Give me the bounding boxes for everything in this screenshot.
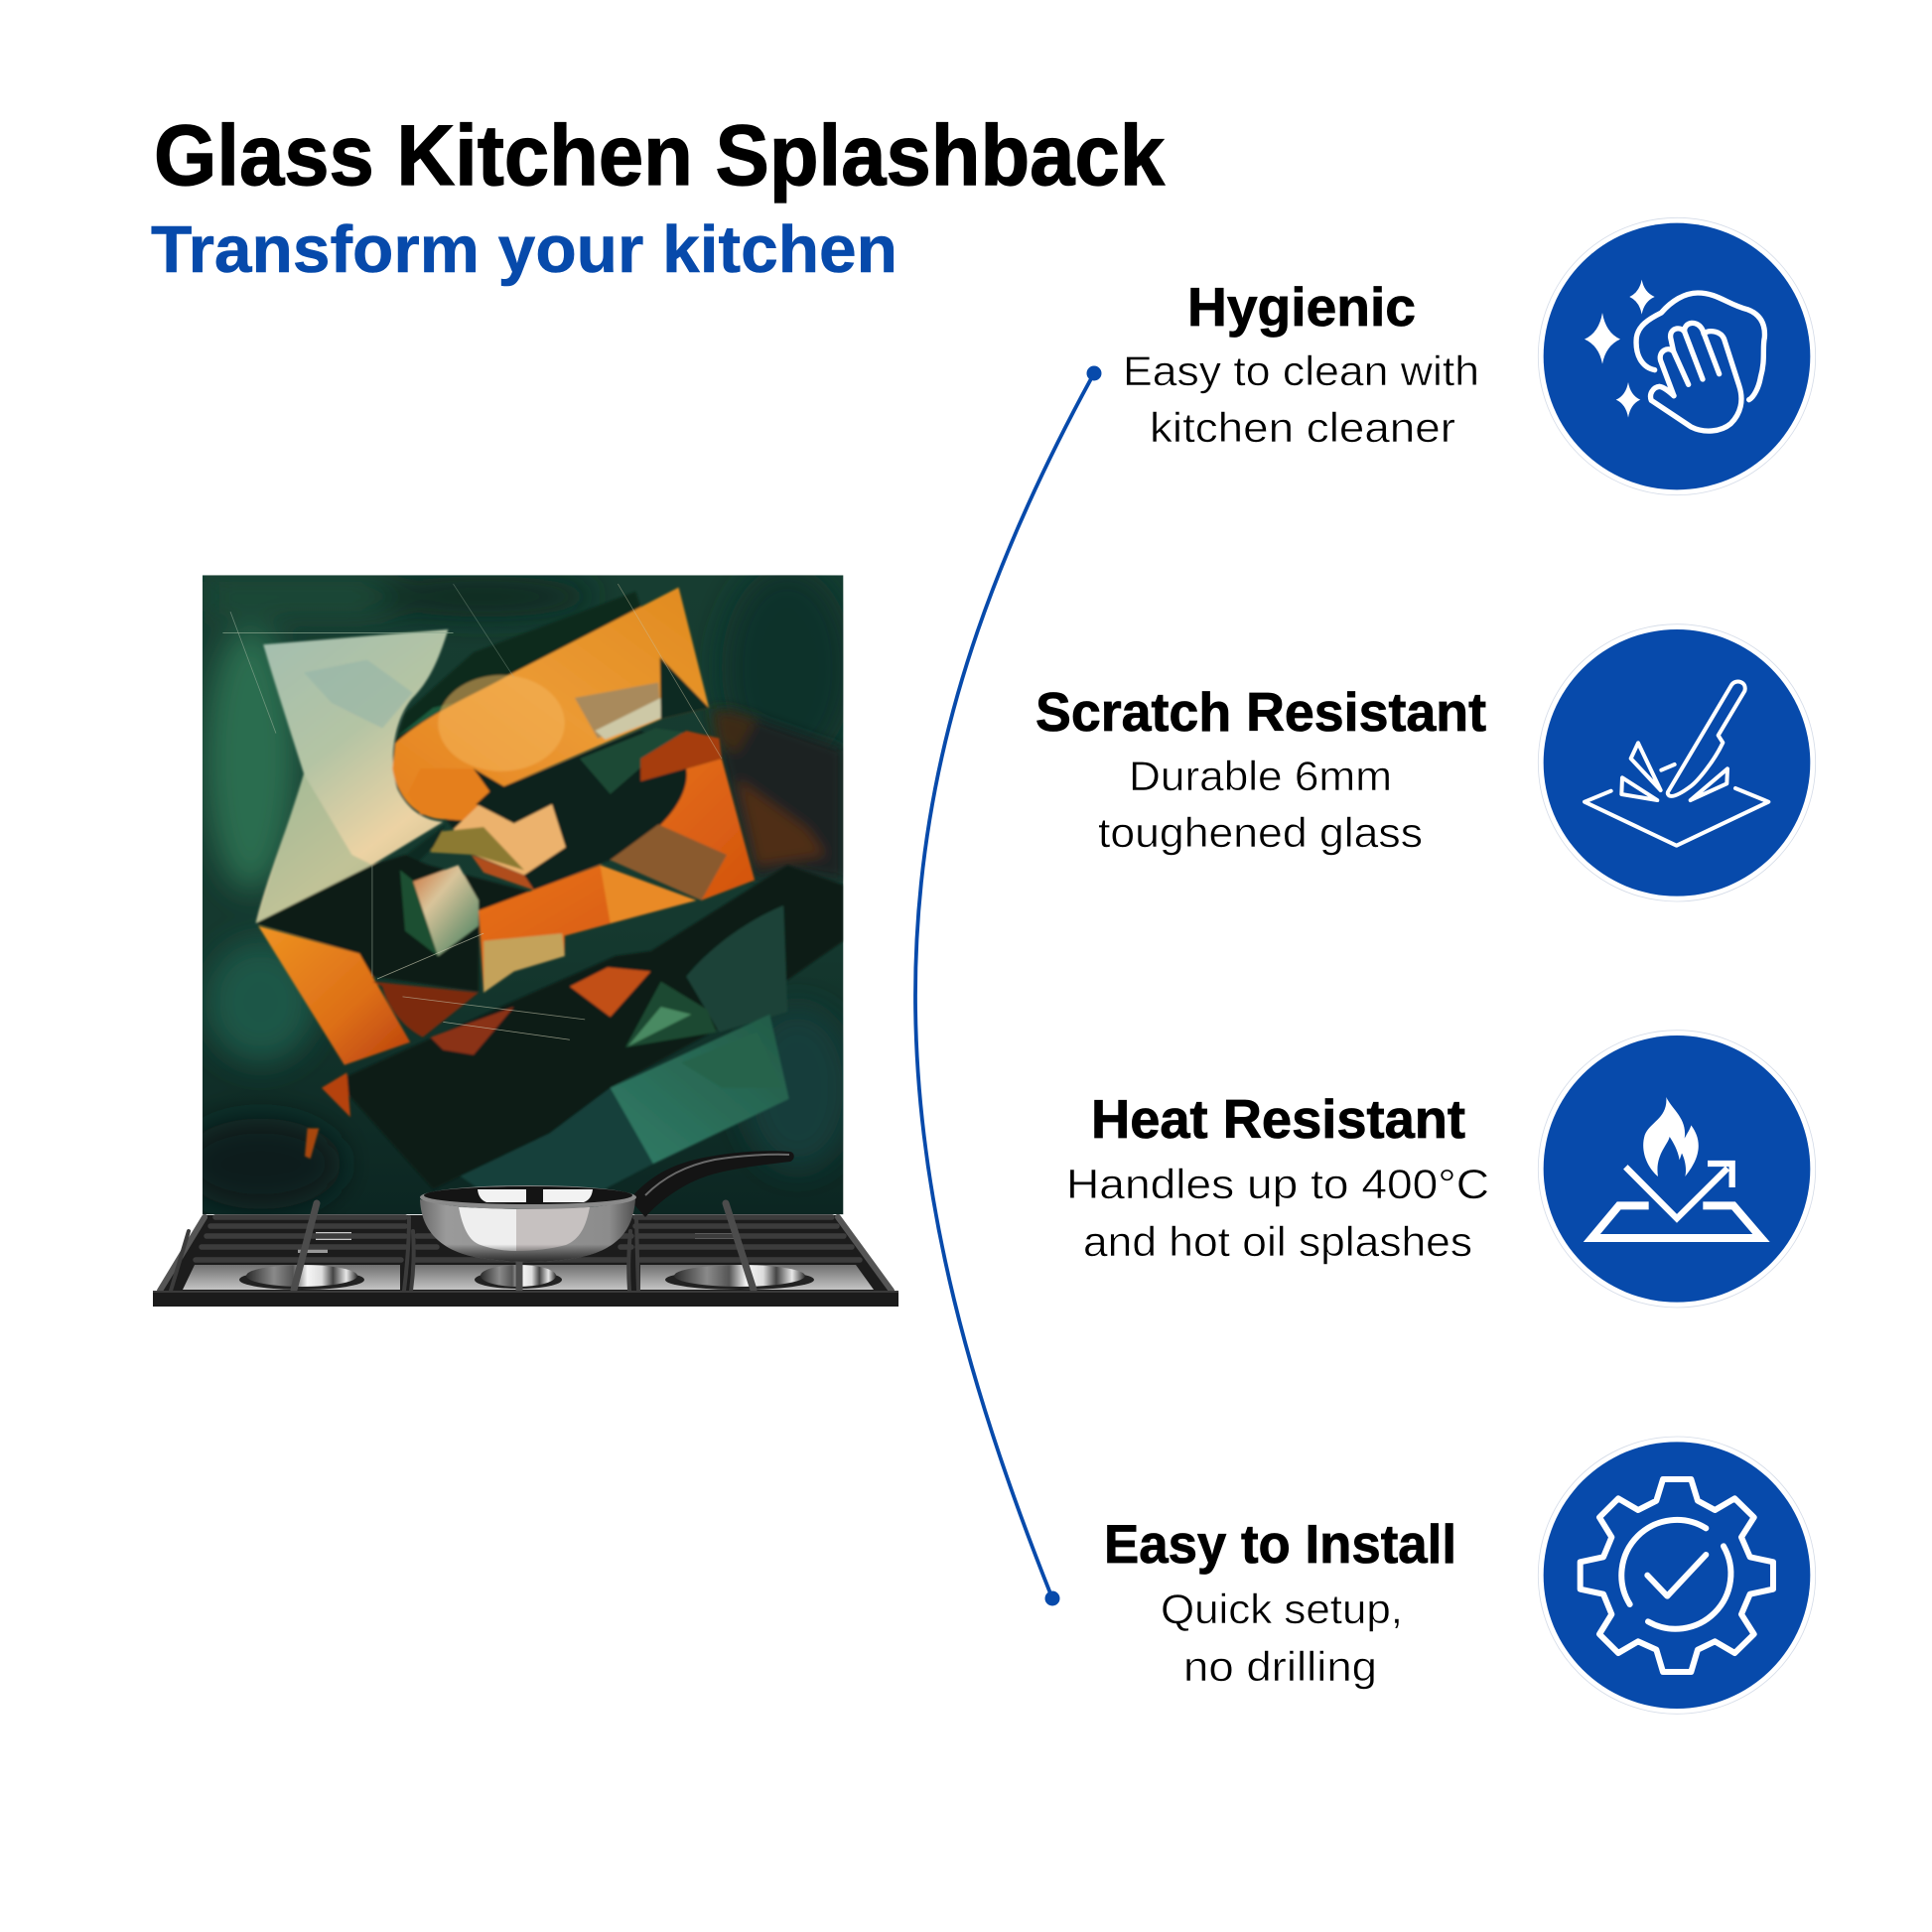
- feature: Heat Resistant: [1066, 1088, 1489, 1265]
- gas hob: [153, 1203, 898, 1307]
- grates: [160, 1203, 892, 1291]
- description: no drilling: [1183, 1643, 1377, 1690]
- heading: Easy to Install: [1104, 1513, 1456, 1575]
- description: kitchen cleaner: [1150, 404, 1455, 451]
- feature: Hygienic: [1123, 276, 1479, 451]
- title: Glass Kitchen Splashback: [154, 108, 1165, 204]
- description: Easy to clean with: [1123, 347, 1479, 394]
- description: Durable 6mm: [1129, 753, 1392, 799]
- icon: gear with check mark: [1538, 1437, 1816, 1714]
- description: toughened glass: [1098, 809, 1423, 856]
- icon: hand wiping with sparkles: [1538, 217, 1816, 495]
- feature: Easy to Install: [1104, 1513, 1456, 1690]
- product image: splashback panel over gas hob: [153, 566, 898, 1307]
- heading: Heat Resistant: [1091, 1088, 1465, 1150]
- feature: Scratch Resistant: [1035, 681, 1486, 856]
- abstract artwork panel: [180, 566, 854, 1214]
- heading: Scratch Resistant: [1035, 681, 1486, 743]
- description: and hot oil splashes: [1083, 1218, 1472, 1265]
- description: Quick setup,: [1161, 1586, 1403, 1632]
- icon: flame and deflecting arrow: [1538, 1031, 1816, 1308]
- burners: [239, 1232, 814, 1290]
- description: Handles up to 400°C: [1066, 1161, 1489, 1207]
- subtitle: Transform your kitchen: [151, 212, 897, 287]
- connector curve with end dots: [915, 365, 1102, 1606]
- heading: Hygienic: [1187, 276, 1416, 338]
- frying pan: [420, 1151, 794, 1262]
- icon: knife scratching glass: [1538, 624, 1816, 901]
